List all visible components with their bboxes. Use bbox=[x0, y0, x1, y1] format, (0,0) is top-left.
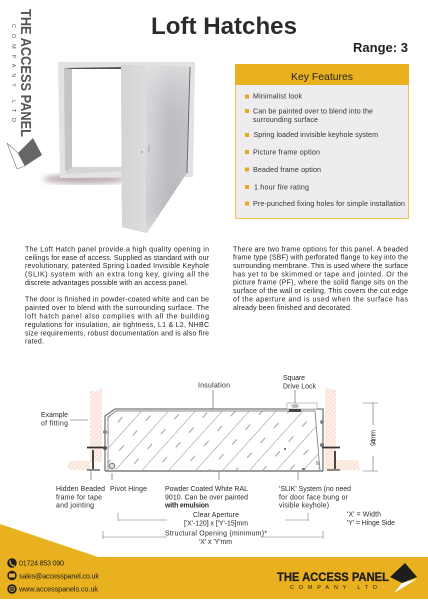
footer logo bbox=[277, 563, 417, 593]
technical diagram bbox=[41, 375, 395, 546]
diagram labels: Insulation bbox=[198, 382, 230, 390]
text block: left column bbox=[25, 246, 210, 346]
dimension: 94mm: 94mm bbox=[370, 430, 378, 446]
text block: right column: frame type (SBF) with perforated flange to key into the bbox=[233, 255, 408, 262]
key features header bbox=[235, 64, 409, 85]
right wall section bbox=[325, 388, 360, 471]
insulated door section bbox=[105, 409, 323, 471]
diagram labels: Square bbox=[283, 375, 305, 382]
diagram labels: 'X' x 'Y'mm bbox=[199, 539, 232, 546]
diagram labels: 9010. Can be over painted bbox=[165, 494, 248, 502]
text block: right column: surface of the wall or ceiling. This covers the cut edge bbox=[233, 288, 408, 295]
text block: left column: discrete advantages possible with an access panel. bbox=[25, 280, 188, 287]
diagram labels: Drive Lock bbox=[283, 384, 317, 390]
diagram labels: of fitting bbox=[41, 420, 68, 428]
right fixing bbox=[284, 420, 340, 470]
diagram labels: Example bbox=[41, 412, 68, 419]
left wall section bbox=[67, 388, 102, 470]
feature list: 1 hour fire rating bbox=[254, 184, 309, 192]
diagram labels: frame for tape bbox=[56, 494, 102, 502]
contact details bbox=[7, 558, 99, 594]
footer band bbox=[0, 524, 428, 599]
text block: right column: of the aperture and is used when the surface has bbox=[233, 296, 408, 303]
text block: left column: size requirements, robust documentation and is also fire bbox=[25, 330, 209, 337]
panel: key features bbox=[235, 64, 409, 218]
diagram labels: 'X' = Width bbox=[347, 512, 381, 518]
feature list: Can be painted over to blend into the bbox=[253, 108, 373, 116]
dimension lines bbox=[103, 513, 323, 539]
diagram labels: Powder Coated White RAL bbox=[165, 486, 248, 493]
dimension: 94mm bbox=[363, 403, 378, 471]
icon: phone bbox=[7, 558, 17, 568]
diagram labels: Structural Opening (minimum)* bbox=[165, 530, 267, 538]
feature list: Minimalist look bbox=[253, 92, 302, 100]
diagram labels: 'Y' = Hinge Side bbox=[347, 520, 395, 527]
text block: left column: (SLIK) system with an extra long key, giving all the bbox=[25, 272, 209, 279]
footer logo: COMPANY LTD bbox=[290, 585, 377, 591]
diagram labels bbox=[41, 375, 395, 546]
title: Loft Hatches bbox=[151, 13, 297, 40]
text block: right column: already been finished and decorated. bbox=[233, 305, 352, 312]
text block: right column: surrounding membrane. This is used where the surface bbox=[233, 263, 408, 270]
diagram labels: with emulsion bbox=[164, 502, 209, 510]
diagram labels: visible keyhole) bbox=[279, 502, 329, 510]
diagram labels: and jointing bbox=[56, 502, 94, 510]
footer logo: THE ACCESS PANEL bbox=[277, 570, 389, 584]
text block: left column: rated. bbox=[25, 339, 44, 346]
side logo: COMPANY LTD bbox=[10, 24, 16, 122]
side logo bbox=[7, 9, 42, 169]
pivot hinge bbox=[109, 463, 115, 469]
text block: left column: loft hatch panel also complies with all the building bbox=[25, 314, 209, 321]
range label: Range: 3 bbox=[353, 41, 408, 55]
diagram labels: for door face bung or bbox=[279, 494, 349, 502]
icon: email bbox=[7, 571, 17, 580]
feature list bbox=[245, 92, 405, 208]
text block: right column: picture frame (PF), where the solid flange sits on the bbox=[233, 280, 408, 287]
text block: left column: regulations for insulation, air tightness, L1 & L2, NHBC bbox=[25, 322, 209, 329]
text block: left column: revolutionary, patented Spring Loaded Invisible Keyhole bbox=[25, 263, 209, 270]
feature list: Picture frame option bbox=[253, 148, 320, 156]
text block: left column: The Loft Hatch panel provide a high quality opening in bbox=[25, 246, 209, 253]
text block: right column bbox=[233, 246, 408, 312]
text block: right column: has yet to be skimmed or tape and jointed. Or the bbox=[233, 271, 408, 278]
feature list: Beaded frame option bbox=[253, 166, 321, 174]
diagram labels: ['X'-120] x ['Y'-15]mm bbox=[184, 520, 248, 528]
text block: left column: The door is finished in powder-coated white and can be bbox=[25, 297, 209, 304]
text block: left column: painted over to blend with the surrounding surface. The bbox=[25, 305, 209, 312]
text block: right column: There are two frame options for this panel. A beaded bbox=[233, 246, 408, 253]
contact details: sales@accesspanel.co.uk bbox=[19, 572, 99, 580]
feature list: surrounding surface bbox=[253, 116, 318, 124]
leader lines bbox=[70, 390, 298, 480]
diagram labels: Hidden Beaded bbox=[56, 486, 105, 493]
text block: left column: ceilings for ease of access. Supplied as standard with our bbox=[25, 255, 210, 262]
square drive lock bbox=[287, 403, 317, 412]
contact details: 01724 853 090 bbox=[19, 558, 64, 568]
diagram labels: Pivot Hinge bbox=[110, 486, 147, 493]
feature list: Pre-punched fixing holes for simple installation bbox=[253, 200, 405, 208]
key features header: Key Features bbox=[291, 71, 353, 83]
product photo: loft hatch bbox=[43, 62, 195, 233]
diagram labels: Clear Aperture bbox=[193, 512, 239, 519]
feature list: Spring loaded invisible keyhole system bbox=[254, 131, 378, 139]
icon: web bbox=[7, 584, 17, 594]
contact details: www.accesspanels.co.uk bbox=[18, 584, 98, 594]
left fixing bbox=[87, 430, 107, 470]
diagram labels: 'SLIK' System (no need bbox=[279, 486, 351, 493]
side logo: THE ACCESS PANEL bbox=[17, 9, 34, 137]
